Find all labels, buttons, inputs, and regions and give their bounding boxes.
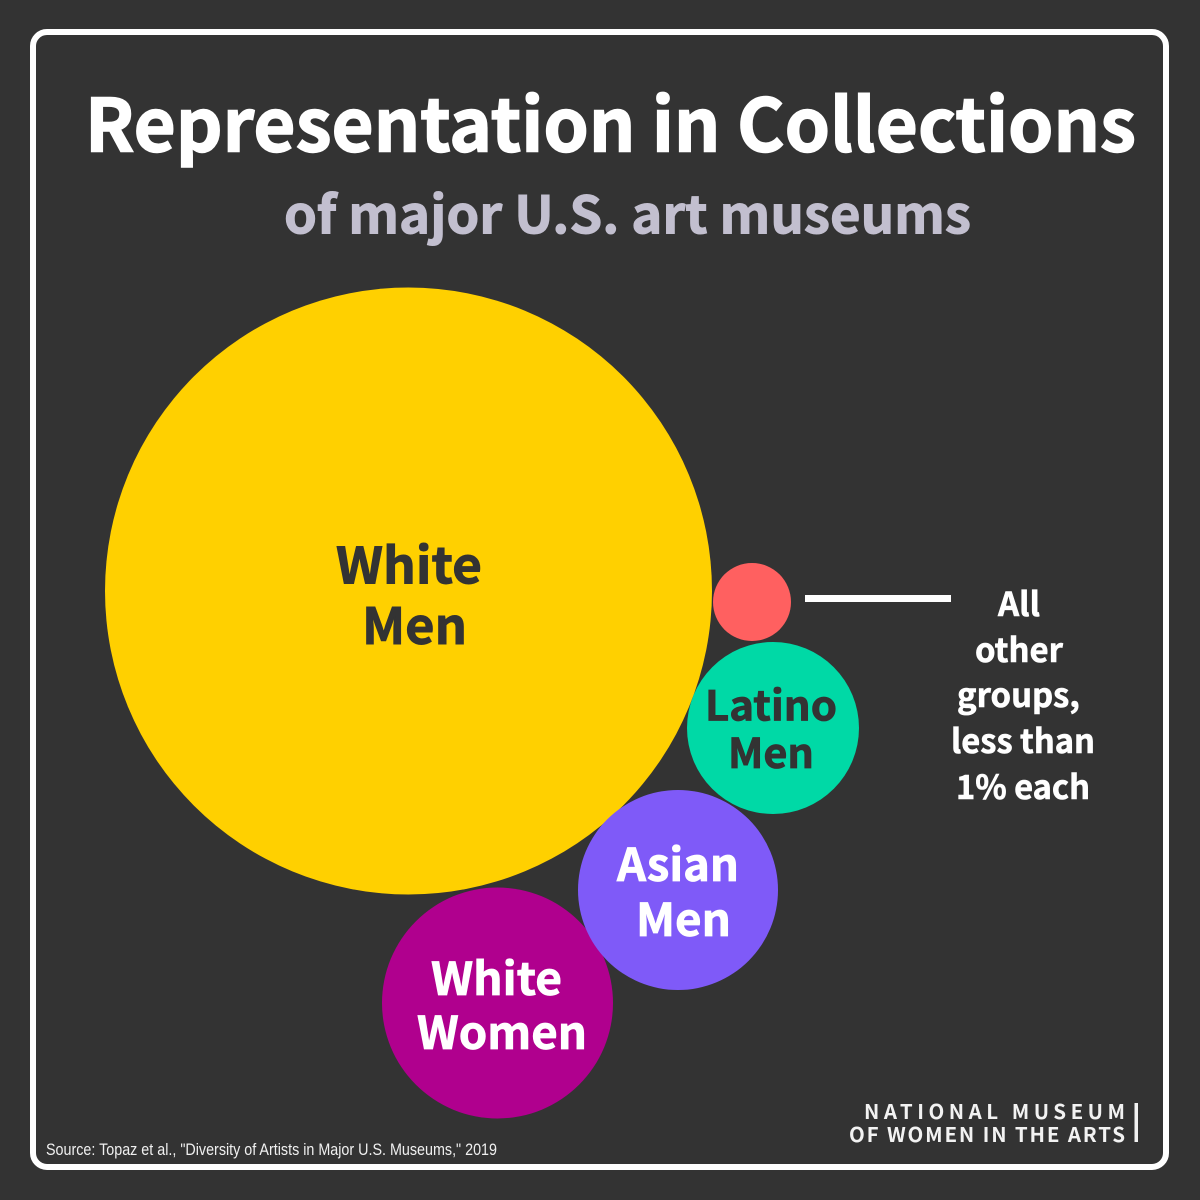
leader line	[805, 595, 951, 602]
logo: National Museum of Women in the Arts	[849, 1095, 1138, 1148]
label: all other groups: groups,	[957, 669, 1080, 717]
bubble: White Women: Women	[417, 997, 587, 1062]
bubble: White Women	[382, 888, 613, 1118]
bubble: Latino Men: Latino	[705, 672, 837, 732]
label: all other groups	[951, 578, 1095, 809]
bubble: all other groups	[713, 563, 791, 641]
bubble: Asian Men: Asian	[616, 829, 739, 894]
source note: Source: Topaz et al., "Diversity of Artists in Major U.S. Museums," 2019	[46, 1141, 497, 1159]
bubble: White Women: White	[431, 943, 562, 1008]
bubble: Asian Men: Men	[636, 884, 731, 949]
bubble: Latino Men	[687, 642, 859, 814]
bubble: White Men: White	[336, 526, 482, 598]
label: all other groups: All	[997, 578, 1040, 626]
label: all other groups: other	[975, 624, 1064, 672]
bubble: White Men	[105, 288, 712, 894]
logo: National Museum of Women in the Arts: OF WOMEN IN THE ARTS	[849, 1118, 1125, 1148]
title: Representation in Collections	[85, 67, 1136, 173]
logo: National Museum of Women in the Arts: NATIONAL MUSEUM	[864, 1095, 1125, 1125]
label: all other groups: less than	[951, 715, 1095, 763]
bubble: Asian Men	[578, 790, 778, 990]
subtitle: of major U.S. art museums	[284, 174, 971, 248]
label: all other groups: 1% each	[956, 761, 1090, 809]
bubble: Latino Men: Men	[728, 720, 814, 780]
bubble: White Men: Men	[362, 587, 467, 659]
